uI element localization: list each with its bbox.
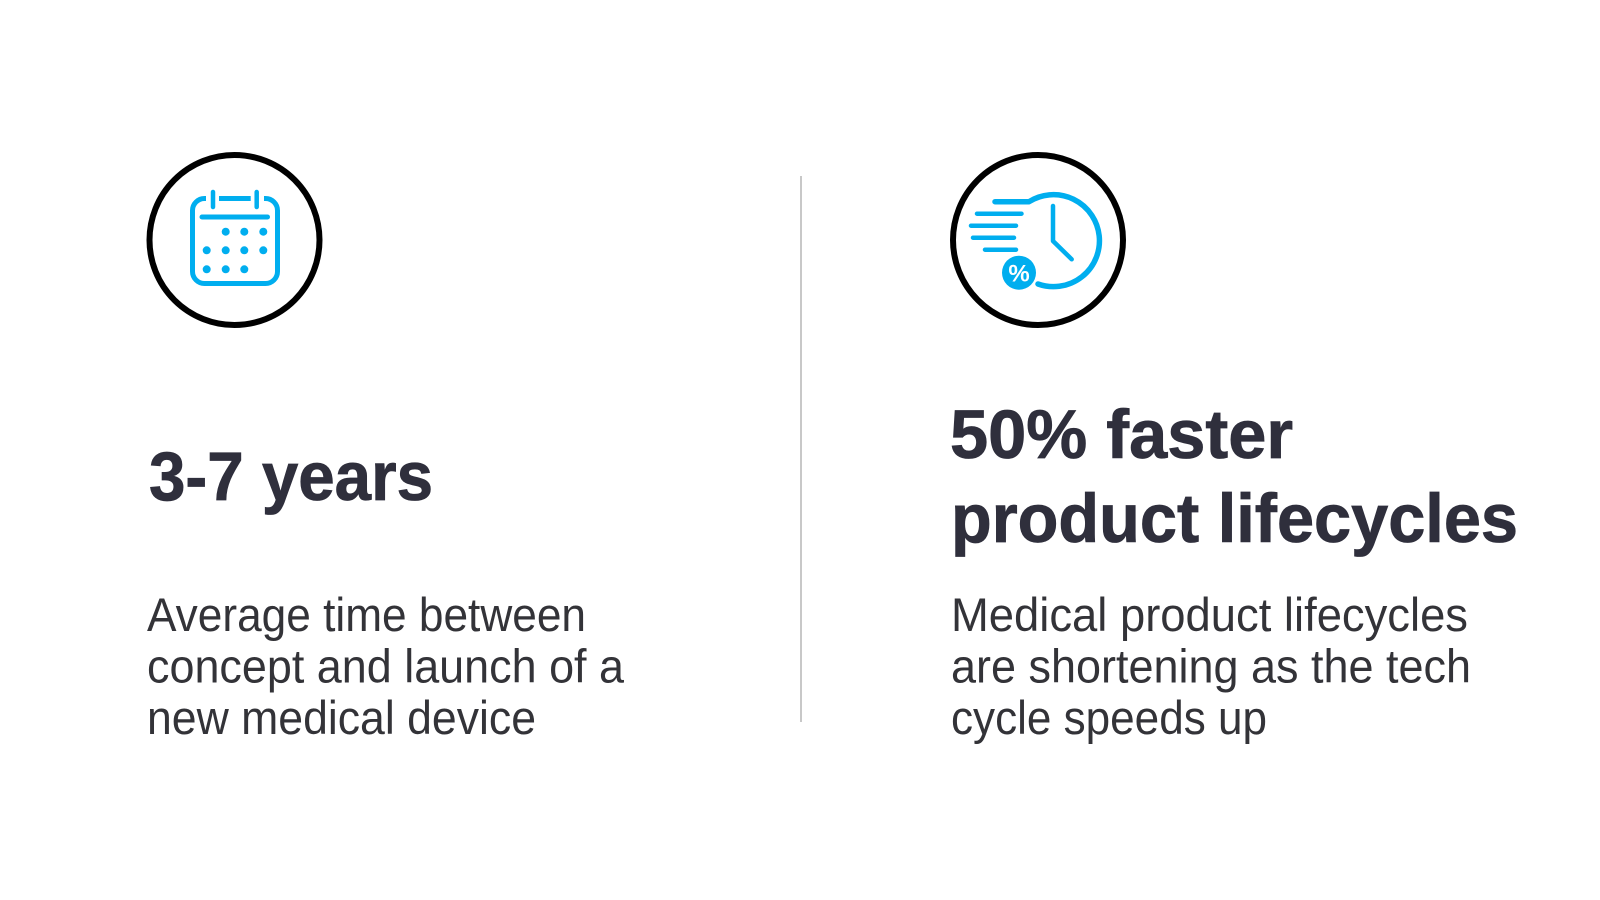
panel: concept to launch time [147, 155, 625, 744]
text block: lifecycle description: are shortening as the tech [951, 640, 1471, 692]
heading: 50% faster product lifecycles [950, 396, 1518, 557]
icon: percent badge: % [1008, 260, 1030, 288]
icon: fast clock with percent badge in circle [953, 155, 1123, 325]
heading: 50% faster product lifecycles: 50% faster [950, 396, 1293, 473]
text block: lifecycle description: Medical product lifecycles [951, 588, 1468, 641]
text block: average time description: Average time between [147, 588, 586, 641]
text block: lifecycle description: cycle speeds up [951, 691, 1267, 744]
icon: percent badge [1002, 256, 1036, 290]
text block: lifecycle description [951, 588, 1471, 744]
heading: 50% faster product lifecycles: product lifecycles [951, 480, 1518, 557]
heading: 3-7 years: 3-7 years [149, 438, 433, 515]
divider line [800, 176, 802, 722]
text block: average time description: concept and launch of a [147, 640, 625, 692]
text block: average time description: new medical device [147, 691, 536, 744]
text block: average time description [147, 588, 625, 744]
panel: faster product lifecycles [950, 155, 1518, 744]
icon: calendar in circle [150, 155, 320, 325]
